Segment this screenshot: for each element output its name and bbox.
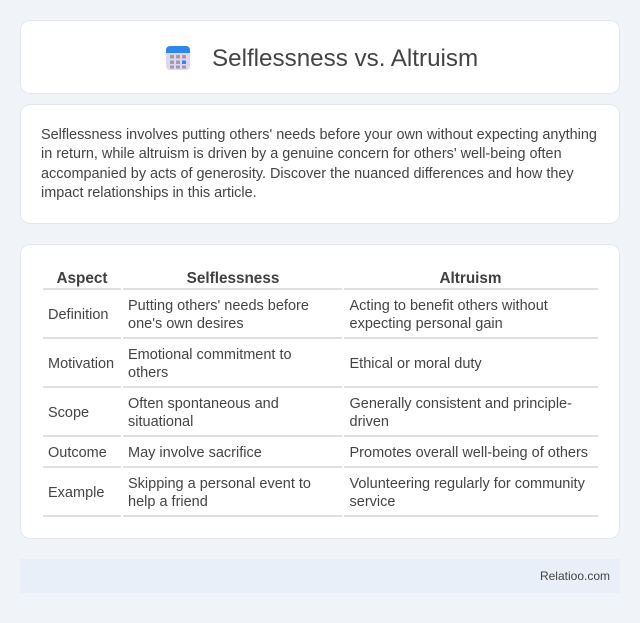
table header — [56, 270, 502, 287]
row: outcome: May involve sacrifice — [128, 445, 262, 461]
row: motivation: Motivation — [48, 356, 114, 372]
row: motivation — [48, 347, 482, 381]
row: motivation: others — [128, 365, 168, 381]
row: definition: Putting others' needs before — [128, 298, 309, 314]
intro paragraph: Selflessness involves putting others' needs before your own without expecting anything — [41, 126, 597, 142]
row: definition — [48, 298, 548, 332]
row: scope: driven — [350, 414, 389, 430]
row: example: Skipping a personal event to — [128, 476, 311, 492]
footer bar — [20, 559, 620, 593]
panel: comparison table — [20, 244, 620, 539]
row: example: Example — [48, 485, 104, 501]
row: scope: Scope — [48, 405, 89, 421]
row: outcome: Promotes overall well-being of others — [350, 445, 588, 461]
panel: intro text — [20, 104, 620, 224]
title: Selflessness vs. Altruism — [212, 45, 478, 72]
row: scope — [48, 396, 572, 430]
row: outcome: Outcome — [48, 445, 107, 461]
row: definition: one's own desires — [128, 316, 244, 332]
table header: Selflessness — [187, 270, 279, 287]
intro paragraph: accompanied by acts of generosity. Discover the nuanced differences and how they — [41, 166, 574, 182]
icon: calendar — [166, 46, 190, 70]
row: motivation: Ethical or moral duty — [350, 356, 482, 372]
row: motivation: Emotional commitment to — [128, 347, 292, 363]
row: definition: Acting to benefit others without — [350, 298, 548, 314]
title card — [20, 20, 620, 94]
intro paragraph: impact relationships in this article. — [41, 185, 257, 201]
row: example — [48, 476, 585, 510]
row: scope: Generally consistent and principle- — [350, 396, 572, 412]
row: definition: Definition — [48, 307, 108, 323]
row: definition: expecting personal gain — [350, 316, 503, 332]
table header: Altruism — [439, 270, 502, 287]
footer credit: Relatioo.com — [540, 569, 610, 583]
table header: Aspect — [56, 270, 108, 287]
row: scope: Often spontaneous and — [128, 396, 279, 412]
row: example: Volunteering regularly for community — [350, 476, 585, 492]
row: example: help a friend — [128, 494, 208, 510]
intro paragraph — [41, 126, 597, 201]
row: outcome — [48, 445, 588, 461]
row: scope: situational — [128, 414, 193, 430]
row: example: service — [350, 494, 395, 510]
intro paragraph: in return, while altruism is driven by a genuine concern for others' well-being often — [41, 146, 562, 162]
